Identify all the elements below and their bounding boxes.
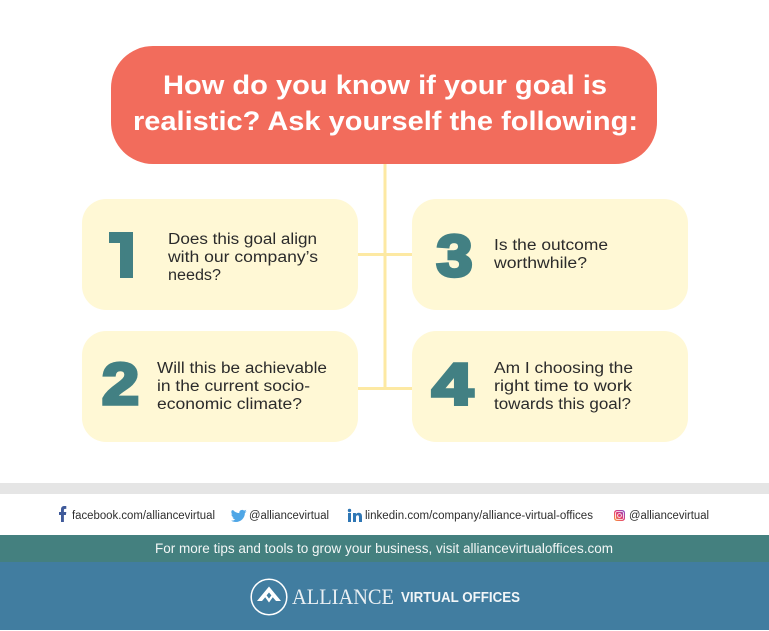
icon: alliance logo bbox=[251, 579, 287, 615]
panel: question 3: Is the outcome bbox=[494, 237, 608, 254]
panel: question 1: with our company’s bbox=[167, 249, 318, 266]
brand name: ALLIANCE bbox=[292, 584, 394, 609]
twitter handle: @alliancevirtual bbox=[249, 510, 329, 522]
footer tips band bbox=[0, 535, 769, 562]
panel: question 1 bbox=[82, 199, 358, 310]
panel: question 4: towards this goal? bbox=[494, 396, 631, 413]
panel: question 4 bbox=[412, 331, 688, 442]
grey divider band bbox=[0, 483, 769, 494]
social links row bbox=[59, 506, 709, 522]
panel: question 3: worthwhile? bbox=[493, 255, 587, 272]
panel: question 2 bbox=[82, 331, 358, 442]
footer logo band bbox=[0, 562, 769, 630]
brand descriptor: VIRTUAL OFFICES bbox=[401, 590, 520, 606]
panel: question 1: 1 bbox=[107, 224, 143, 289]
instagram handle: @alliancevirtual bbox=[629, 510, 709, 522]
panel: question 3: 3 bbox=[436, 224, 472, 289]
panel: question 1: Does this goal align bbox=[168, 231, 317, 248]
panel: question 4: right time to work bbox=[494, 378, 632, 395]
title banner: realistic? Ask yourself the following: bbox=[133, 106, 638, 136]
linkedin link: linkedin.com/company/alliance-virtual-offices bbox=[365, 510, 593, 522]
icon: facebook bbox=[59, 506, 66, 522]
footer tips band: For more tips and tools to grow your business, visit alliancevirtualoffices.com bbox=[155, 541, 613, 556]
connector lines bbox=[356, 160, 414, 390]
panel: question 3 bbox=[412, 199, 688, 310]
facebook link: facebook.com/alliancevirtual bbox=[72, 510, 215, 522]
panel: question 2: Will this be achievable bbox=[157, 360, 327, 377]
panel: question 2: 2 bbox=[102, 352, 139, 417]
title banner bbox=[111, 46, 657, 164]
panel: question 2: economic climate? bbox=[157, 396, 302, 413]
icon: twitter bbox=[231, 510, 247, 522]
icon: linkedin bbox=[348, 509, 362, 522]
panel: question 4: 4 bbox=[432, 352, 473, 417]
title banner: How do you know if your goal is bbox=[163, 70, 607, 100]
panel: question 4: Am I choosing the bbox=[494, 360, 633, 377]
panel: question 1: needs? bbox=[168, 267, 221, 284]
panel: question 2: in the current socio- bbox=[157, 378, 310, 395]
icon: instagram bbox=[614, 510, 625, 521]
